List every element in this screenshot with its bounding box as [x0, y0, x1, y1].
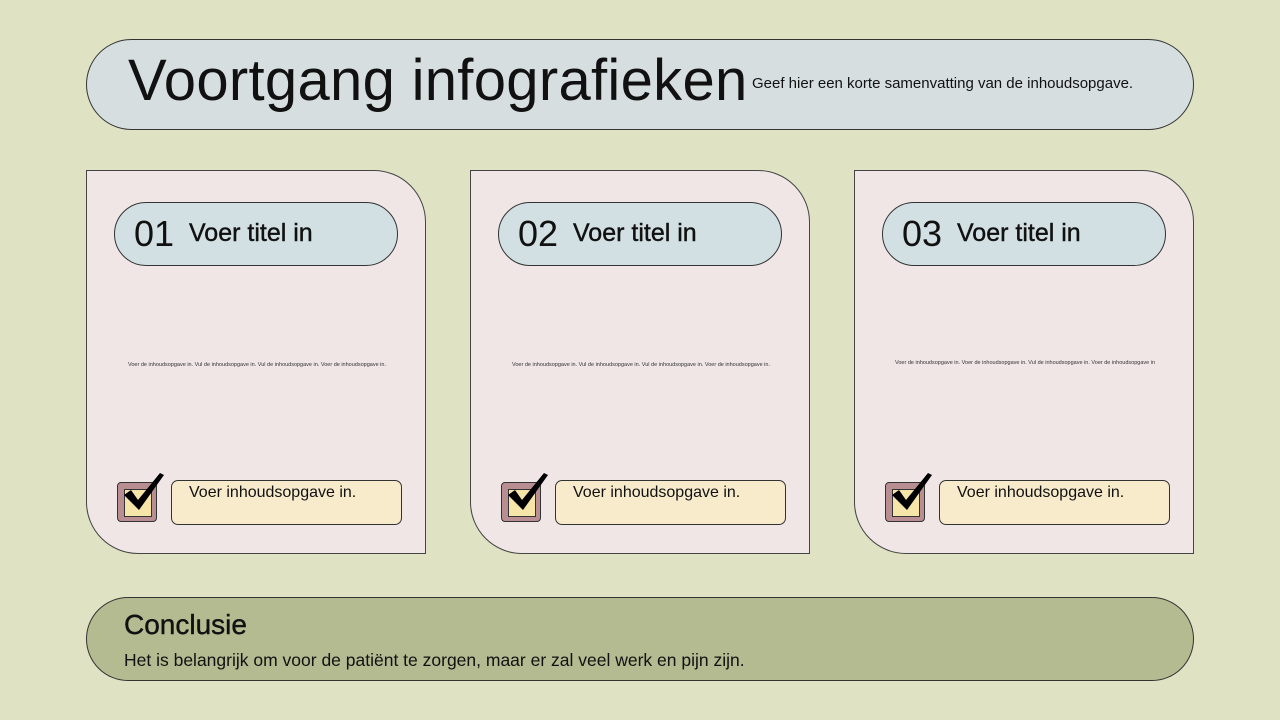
conclusion heading: Conclusie [124, 609, 247, 640]
title: Voortgang infografieken [128, 48, 748, 113]
title pill 03 [882, 202, 1166, 266]
subtitle: Geef hier een korte samenvatting van de inhoudsopgave. [752, 75, 1133, 92]
header banner [86, 39, 1194, 130]
panel: conclusion [86, 597, 1194, 681]
title pill 03: 03 [902, 213, 942, 254]
panel: card 01 [86, 170, 426, 554]
title pill 02: 02 [518, 213, 558, 254]
title pill 02: Voer titel in [573, 219, 697, 247]
icon: checkbox 01 [117, 482, 157, 522]
icon: checkbox 02 [501, 482, 541, 522]
body text 02: Voer de inhoudsopgave in. Vul de inhoudsopgave in. Vul de inhoudsopgave in. Voer de inhoudsopgave in. [512, 362, 770, 368]
content box 01 [171, 480, 402, 525]
body text 03: Voer de inhoudsopgave in. Voer de inhoudsopgave in. Vul de inhoudsopgave in. Voer de inhoudsopgave in [895, 360, 1155, 366]
panel: card 03 [854, 170, 1194, 554]
content box 02 [555, 480, 786, 525]
panel: card 02 [470, 170, 810, 554]
title pill 01: 01 [134, 213, 174, 254]
content box 03 [939, 480, 1170, 525]
icon: checkbox 03 [885, 482, 925, 522]
content box 01: Voer inhoudsopgave in. [189, 484, 356, 501]
content box 02: Voer inhoudsopgave in. [573, 484, 740, 501]
content box 03: Voer inhoudsopgave in. [957, 484, 1124, 501]
body text 01: Voer de inhoudsopgave in. Vul de inhoudsopgave in. Vul de inhoudsopgave in. Voer de inhoudsopgave in. [128, 362, 386, 368]
conclusion text: Het is belangrijk om voor de patiënt te zorgen, maar er zal veel werk en pijn zijn. [124, 650, 745, 670]
title pill 01: Voer titel in [189, 219, 313, 247]
title pill 01 [114, 202, 398, 266]
title pill 03: Voer titel in [957, 219, 1081, 247]
title pill 02 [498, 202, 782, 266]
